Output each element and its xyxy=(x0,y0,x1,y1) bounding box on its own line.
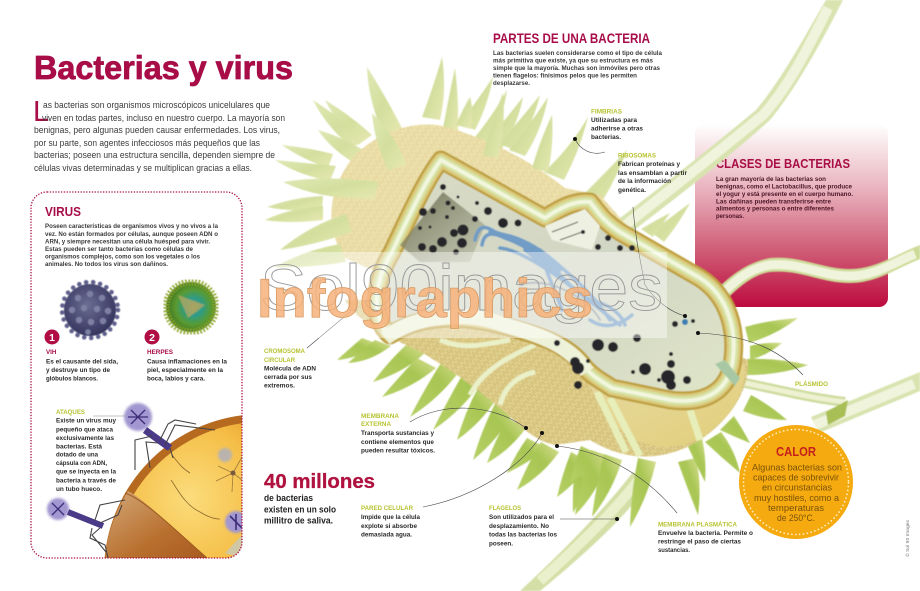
virus description: organismos complejos, como son los vegetales o los xyxy=(45,254,200,260)
intro lines: por su parte, son agentes infecciosos más pequeños que las xyxy=(34,138,260,149)
label: ribosomas: de la información xyxy=(618,178,671,185)
label: membrana externa xyxy=(361,413,435,454)
attack illustration xyxy=(47,403,247,558)
watermark: Sol90images xyxy=(260,251,663,324)
intro lines xyxy=(34,100,285,174)
VIH text: Es el causante del sida, xyxy=(46,358,118,366)
callout: calor xyxy=(739,425,853,539)
icon: HIV virus xyxy=(62,282,118,338)
label: cromosoma circular xyxy=(264,348,316,390)
leader lines xyxy=(307,139,803,519)
text: partes de una bacteria: desplazarse. xyxy=(493,80,530,87)
label: membrana externa: Transporta sustancias y xyxy=(361,430,434,437)
herpes text xyxy=(147,349,227,382)
label: ribosomas: genética. xyxy=(618,187,646,194)
callout: 40 millones: 40 millones xyxy=(264,471,375,493)
spines: front xyxy=(265,93,552,267)
badge 1 xyxy=(44,330,60,344)
label: fimbrias: bacterias. xyxy=(591,134,621,141)
label: membrana plasmatica xyxy=(658,520,753,554)
ataques text: bacteria a través de xyxy=(56,478,116,484)
icon: herpes virus xyxy=(166,282,216,332)
label: fimbrias: adherirse a otras xyxy=(591,126,643,132)
label: membrana externa: MEMBRANA xyxy=(361,413,399,420)
ataques text: ATAQUES xyxy=(56,409,86,416)
heading: virus: VIRUS xyxy=(45,204,81,219)
label: flagelos xyxy=(489,505,557,548)
label: cromosoma circular: extremos. xyxy=(264,382,295,390)
illustration: bacterium xyxy=(265,0,920,591)
heading: partes de una bacteria: PARTES DE UNA BACTERIA xyxy=(493,31,650,46)
plasmid xyxy=(682,319,688,325)
VIH text xyxy=(46,349,118,382)
intro text xyxy=(33,96,285,174)
intro lines: bacterias; poseen una estructura sencilla, dependen siempre de xyxy=(34,150,275,161)
body mass xyxy=(331,124,748,457)
text: clases de bacterias: el yogur y está presente en el cuerpo humano. xyxy=(716,191,853,198)
text: partes de una bacteria: simple que la mayoría. Muchas son inmóviles pero otras xyxy=(493,65,660,72)
text: clases de bacterias: benignas, como el Lactobacillus, que produce xyxy=(716,184,852,190)
label: pared celular: explote si absorbe xyxy=(361,523,417,530)
virus description: ARN, y siempre necesitan una célula huésped para vivir. xyxy=(45,238,210,246)
spines: back top xyxy=(313,57,690,242)
text: clases de bacterias: Las dañinas pueden transferirse entre xyxy=(716,198,831,206)
label: membrana externa: pueden resultar tóxicos. xyxy=(361,448,435,454)
label: ribosomas xyxy=(618,152,687,194)
label: flagelos: FLAGELOS xyxy=(489,505,522,512)
intro lines: células vivas determinadas y se multiplican gracias a ellas. xyxy=(34,163,252,174)
virus description xyxy=(45,223,218,268)
flagellum joint xyxy=(826,400,848,425)
label: flagelos: todas las bacterias los xyxy=(489,532,557,538)
label: membrana externa: EXTERNA xyxy=(361,421,391,428)
label: pared celular: Impide que la célula xyxy=(361,514,420,521)
watermark: Infographics xyxy=(257,267,593,329)
VIH text: y destruye un tipo de xyxy=(46,367,110,374)
calor text: muy hostiles, como a xyxy=(754,492,840,503)
label: membrana plasmatica: sustancias. xyxy=(658,547,690,554)
flagella xyxy=(520,0,920,591)
callout: 40 millones: existen en un solo xyxy=(264,504,336,516)
leader dots xyxy=(524,137,700,521)
ataques text: un tubo hueco. xyxy=(56,486,102,493)
dotted border xyxy=(31,192,242,558)
label: flagelos: poseen. xyxy=(489,540,513,548)
text: partes de una bacteria: Las bacterias suelen considerarse como el tipo de célula xyxy=(493,50,662,57)
badge 1: 1 xyxy=(49,332,55,344)
text: partes de una bacteria: más primitiva que existe, ya que su estructura es más xyxy=(493,58,653,64)
label: membrana plasmatica: MEMBRANA PLASMÁTICA xyxy=(658,520,737,528)
phage 3 xyxy=(224,510,242,556)
label: cromosoma circular: cerrada por sus xyxy=(264,374,312,381)
ataques text: dotado de una xyxy=(56,452,98,458)
text: clases de bacterias xyxy=(716,176,853,220)
phage 2 xyxy=(47,498,125,558)
ataques text: que se inyecta en la xyxy=(56,468,116,476)
calor heading: CALOR xyxy=(776,444,817,459)
herpes text: piel, especialmente en la xyxy=(147,367,223,374)
intro lines: viven en todas partes, incluso en nuestro cuerpo. La mayoría son xyxy=(42,113,285,124)
calor text xyxy=(752,462,842,523)
intro lines: as bacterias son organismos microscópicos unicelulares que xyxy=(43,100,270,111)
label: membrana plasmatica: restringe el paso de ciertas xyxy=(658,538,741,546)
ataques text xyxy=(56,409,116,493)
heading: partes de una bacteria xyxy=(493,31,662,87)
phage 1 xyxy=(124,403,215,470)
ataques text: pequeño que ataca xyxy=(56,426,113,434)
label: cromosoma circular: Molécula de ADN xyxy=(264,366,316,372)
label: cromosoma circular: CIRCULAR xyxy=(264,357,295,364)
callout: 40 millones xyxy=(264,471,375,526)
text: partes de una bacteria: tienen flagelos: finísimos pelos que les permiten xyxy=(493,72,637,80)
virus description: animales. No todos los virus son dañinos. xyxy=(45,261,168,268)
virus description: Estas pueden ser tanto bacterias como células de xyxy=(45,246,193,253)
herpes text: Causa inflamaciones en la xyxy=(147,358,227,366)
label: membrana externa: contiene elementos que xyxy=(361,439,434,446)
label: ribosomas: RIBOSOMAS xyxy=(618,152,657,160)
spines: bottom and right xyxy=(337,318,808,527)
label: plasmido: PLÁSMIDO xyxy=(795,379,828,388)
text: clases de bacterias: La gran mayoría de las bacterias son xyxy=(716,176,826,183)
VIH text: VIH xyxy=(46,349,57,356)
callout: 40 millones: de bacterias xyxy=(264,493,313,504)
label: flagelos: Son utilizados para el xyxy=(489,514,554,521)
ataques text: Existe un virus muy xyxy=(56,418,116,424)
VIH text: glóbulos blancos. xyxy=(46,376,98,382)
label: pared celular: PARED CELULAR xyxy=(361,505,413,512)
credit: © Sol 90 Images xyxy=(904,519,910,557)
drop cap: L xyxy=(33,96,49,128)
text: clases de bacterias: alimentos y personas o entre diferentes xyxy=(716,206,834,212)
calor text: en circunstancias xyxy=(762,482,832,492)
label: flagelos: desplazamiento. No xyxy=(489,523,549,530)
ataques text: cápsula con ADN, xyxy=(56,460,107,467)
text: partes de una bacteria xyxy=(493,50,662,87)
cell wall and cytoplasm xyxy=(377,160,740,401)
intro lines: benignas, pero algunas pueden causar enfermedades. Los virus, xyxy=(34,125,280,136)
label: membrana plasmatica: Envuelve la bacteria. Permite o xyxy=(658,530,753,537)
panel: clases de bacterias xyxy=(695,124,888,307)
callout: 40 millones: millitro de saliva. xyxy=(264,516,333,526)
calor text: temperaturas xyxy=(768,502,824,513)
label: pared celular xyxy=(361,505,420,538)
label: ribosomas: Fabrican proteínas y xyxy=(618,161,680,168)
label: fimbrias: FIMBRIAS xyxy=(591,108,623,116)
label: fimbrias xyxy=(591,108,643,141)
calor text: Algunas bacterias son xyxy=(752,462,842,472)
label: cromosoma circular: CROMOSOMA xyxy=(264,348,305,355)
herpes text: HERPES xyxy=(147,349,173,356)
badge 2: 2 xyxy=(149,332,155,344)
calor text: capaces de sobrevivir xyxy=(753,472,839,482)
ataques text: exclusivamente las xyxy=(56,435,114,442)
label: ribosomas: las ensamblan a partir xyxy=(618,170,687,177)
herpes text: boca, labios y cara. xyxy=(147,376,205,382)
DNA xyxy=(475,227,632,325)
heading: clases de bacterias: CLASES DE BACTERIAS xyxy=(716,156,850,171)
calor text: de 250°C. xyxy=(777,512,815,523)
badge 2 xyxy=(144,330,160,344)
label: fimbrias: Utilizadas para xyxy=(591,117,637,124)
panel: virus xyxy=(31,192,247,558)
virus description: vez. No están formados por células, aunque poseen ADN o xyxy=(45,231,218,238)
title: Bacterias y virus xyxy=(34,50,293,87)
ribosomes xyxy=(418,184,695,390)
ataques text: bacterias. Está xyxy=(56,444,102,450)
text: clases de bacterias: personas. xyxy=(716,213,744,220)
virus description: Poseen características de organismos vivos y no vivos a la xyxy=(45,223,218,230)
label: pared celular: demasiada agua. xyxy=(361,532,412,538)
